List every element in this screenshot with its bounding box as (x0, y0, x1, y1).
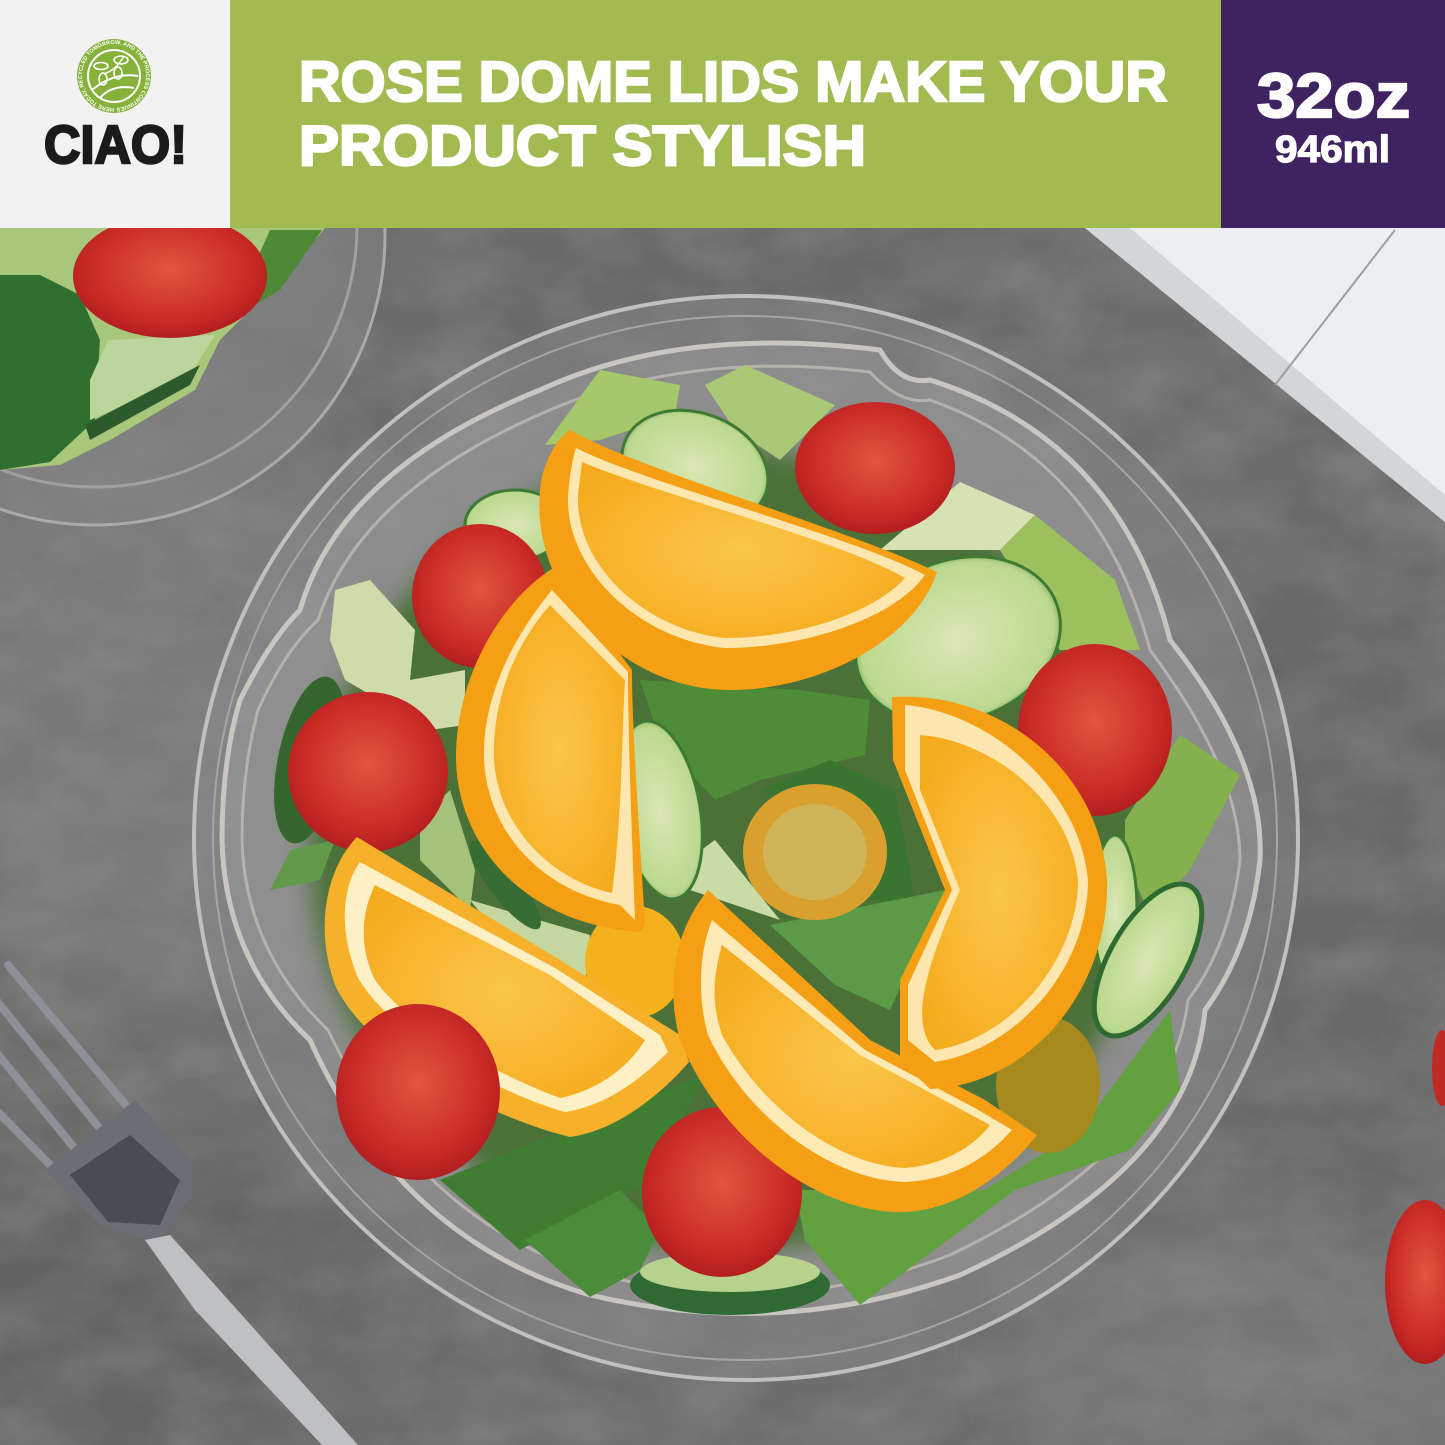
orange wedge: bottom middle (673, 890, 1037, 1212)
banner: headline panel (230, 0, 1221, 228)
banner: logo panel (0, 0, 230, 228)
tomato: lower left, on top of wedge (336, 1004, 500, 1180)
salad base and lettuce (270, 365, 1240, 1305)
title (299, 50, 1167, 178)
title: ROSE DOME LIDS MAKE YOUR (299, 50, 1167, 114)
orange wedge: left (456, 567, 645, 932)
yellow tomatoes (585, 784, 1100, 1153)
logo wordmark: CIAO! (44, 115, 187, 175)
clear rose dome bowl (194, 296, 1298, 1380)
orange wedge: bottom left (325, 837, 689, 1137)
icon: CIAO round badge: HERE TODAY, RECYCLED TOMORROW. AND THE PROCESS CONTINUES (78, 40, 150, 112)
fork (0, 965, 358, 1445)
tomato: top left (73, 214, 267, 338)
banner: size panel (1221, 0, 1445, 228)
size in ounces: 32oz (1257, 62, 1410, 131)
orange wedge: right (892, 697, 1107, 1089)
title: PRODUCT STYLISH (299, 114, 866, 178)
size in millilitres: 946ml (1275, 129, 1390, 171)
orange wedge: top (539, 430, 937, 690)
red tomatoes (288, 402, 1445, 1364)
neighbouring salad bowl, top left (0, 0, 385, 525)
white paper corner (1085, 228, 1445, 522)
cucumber slices (261, 391, 1223, 1315)
